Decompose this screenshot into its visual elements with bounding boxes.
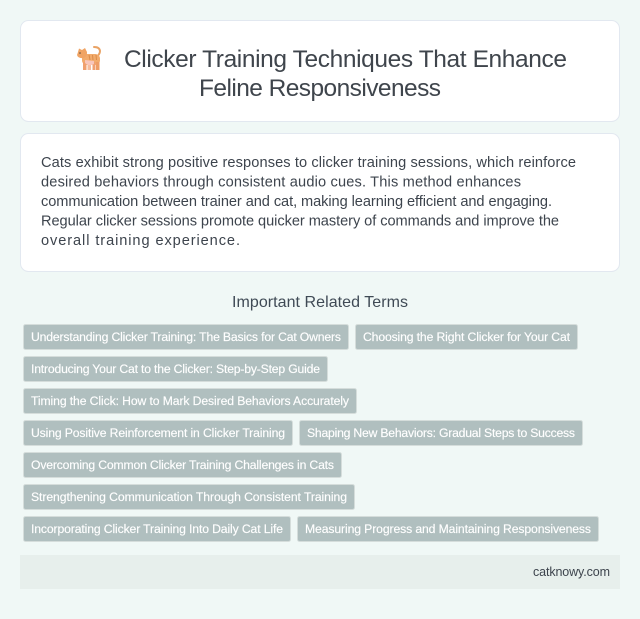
- tag: [24, 452, 342, 478]
- summary text: [41, 155, 576, 249]
- tag: Overcoming Common Clicker Training Challenges in Cats: [31, 458, 334, 472]
- summary text: Cats exhibit strong positive responses to clicker training sessions, which reinforce: [41, 155, 576, 171]
- tag: [24, 388, 356, 414]
- tag list: [24, 324, 598, 542]
- tag: Understanding Clicker Training: The Basics for Cat Owners: [31, 330, 341, 344]
- icon: cat: [77, 47, 100, 70]
- title: Feline Responsiveness: [199, 75, 441, 102]
- tag: [24, 484, 354, 510]
- summary text: communication between trainer and cat, making learning efficient and engaging.: [41, 194, 552, 210]
- footer: [20, 555, 620, 589]
- tag: [298, 516, 598, 542]
- tag: Choosing the Right Clicker for Your Cat: [363, 330, 571, 344]
- tag: [356, 324, 578, 350]
- footer: catknowy.com: [533, 565, 610, 579]
- tag: Shaping New Behaviors: Gradual Steps to Success: [307, 426, 575, 440]
- title: Clicker Training Techniques That Enhance: [124, 46, 567, 73]
- tag: [300, 420, 582, 446]
- heading: related terms: Important Related Terms: [232, 294, 408, 311]
- panel: title card: [20, 20, 620, 122]
- tag: Strengthening Communication Through Consistent Training: [31, 490, 347, 504]
- tag: [24, 420, 292, 446]
- summary text: Regular clicker sessions promote quicker mastery of commands and improve the: [41, 214, 559, 230]
- tag: Measuring Progress and Maintaining Responsiveness: [305, 522, 591, 536]
- tag: [24, 356, 328, 382]
- title: [124, 46, 567, 102]
- tag: [24, 516, 290, 542]
- tag: Incorporating Clicker Training Into Daily Cat Life: [31, 522, 283, 536]
- tag: Timing the Click: How to Mark Desired Behaviors Accurately: [31, 394, 350, 408]
- tag: [24, 324, 348, 350]
- panel: summary card: [20, 134, 620, 272]
- tag: Introducing Your Cat to the Clicker: Step-by-Step Guide: [31, 362, 320, 376]
- summary text: desired behaviors through consistent audio cues. This method enhances: [41, 174, 521, 190]
- summary text: overall training experience.: [41, 233, 240, 249]
- tag: Using Positive Reinforcement in Clicker Training: [31, 426, 285, 440]
